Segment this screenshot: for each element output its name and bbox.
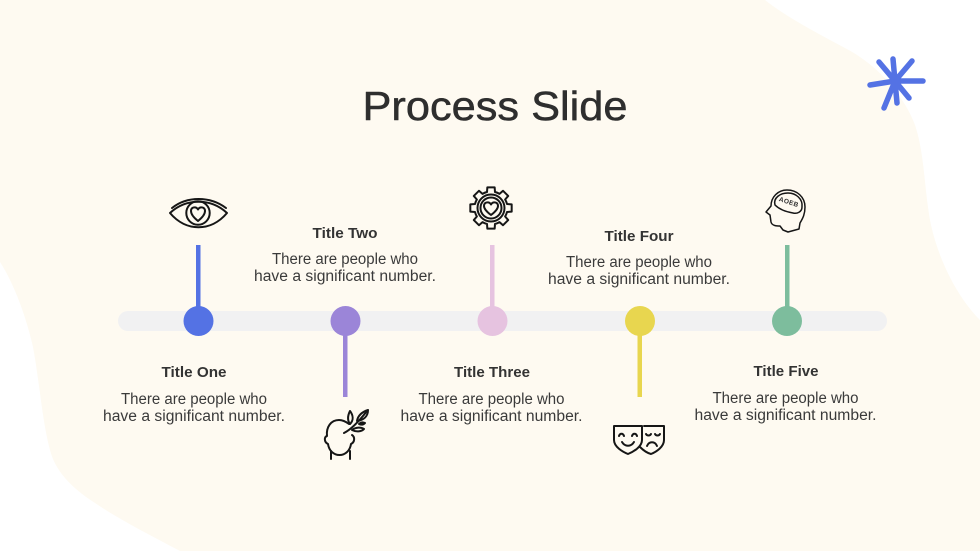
description: have a significant number. bbox=[694, 407, 876, 424]
icon: gear with heart bbox=[470, 187, 512, 229]
node bbox=[478, 306, 508, 336]
icon: blue asterisk bbox=[870, 59, 923, 108]
node bbox=[772, 306, 802, 336]
description: have a significant number. bbox=[254, 268, 436, 285]
node bbox=[184, 306, 214, 336]
node bbox=[330, 306, 360, 336]
connector bbox=[196, 245, 200, 321]
connector bbox=[343, 321, 348, 397]
heading: Title One bbox=[162, 364, 226, 381]
description: have a significant number. bbox=[400, 408, 582, 425]
icon: theatre masks bbox=[614, 426, 664, 454]
step 4: Title Four bbox=[548, 228, 730, 454]
description: There are people who bbox=[566, 254, 712, 271]
heading: Title Three bbox=[454, 364, 530, 381]
description: There are people who bbox=[418, 391, 564, 408]
timeline track bbox=[118, 311, 887, 331]
brain letters: AOEB bbox=[778, 196, 799, 209]
description: There are people who bbox=[712, 390, 858, 407]
description: There are people who bbox=[272, 251, 418, 268]
description: have a significant number. bbox=[103, 408, 285, 425]
node bbox=[625, 306, 655, 336]
connector bbox=[785, 245, 790, 321]
description: There are people who bbox=[121, 391, 267, 408]
step 2: Title Two bbox=[254, 225, 436, 459]
icon: eye with heart bbox=[170, 199, 227, 227]
icon: head with brain bbox=[766, 190, 805, 232]
step 1: Title One bbox=[103, 199, 285, 425]
icon: head with leaves bbox=[325, 410, 368, 459]
heading: Title Two bbox=[312, 225, 378, 242]
description: have a significant number. bbox=[548, 271, 730, 288]
connector bbox=[638, 321, 642, 397]
heading: Title Five bbox=[754, 363, 818, 380]
connector bbox=[490, 245, 494, 321]
step 5: Title Five bbox=[694, 190, 876, 424]
title: Process Slide bbox=[362, 83, 628, 129]
step 3: Title Three bbox=[400, 187, 582, 425]
heading: Title Four bbox=[604, 228, 674, 245]
